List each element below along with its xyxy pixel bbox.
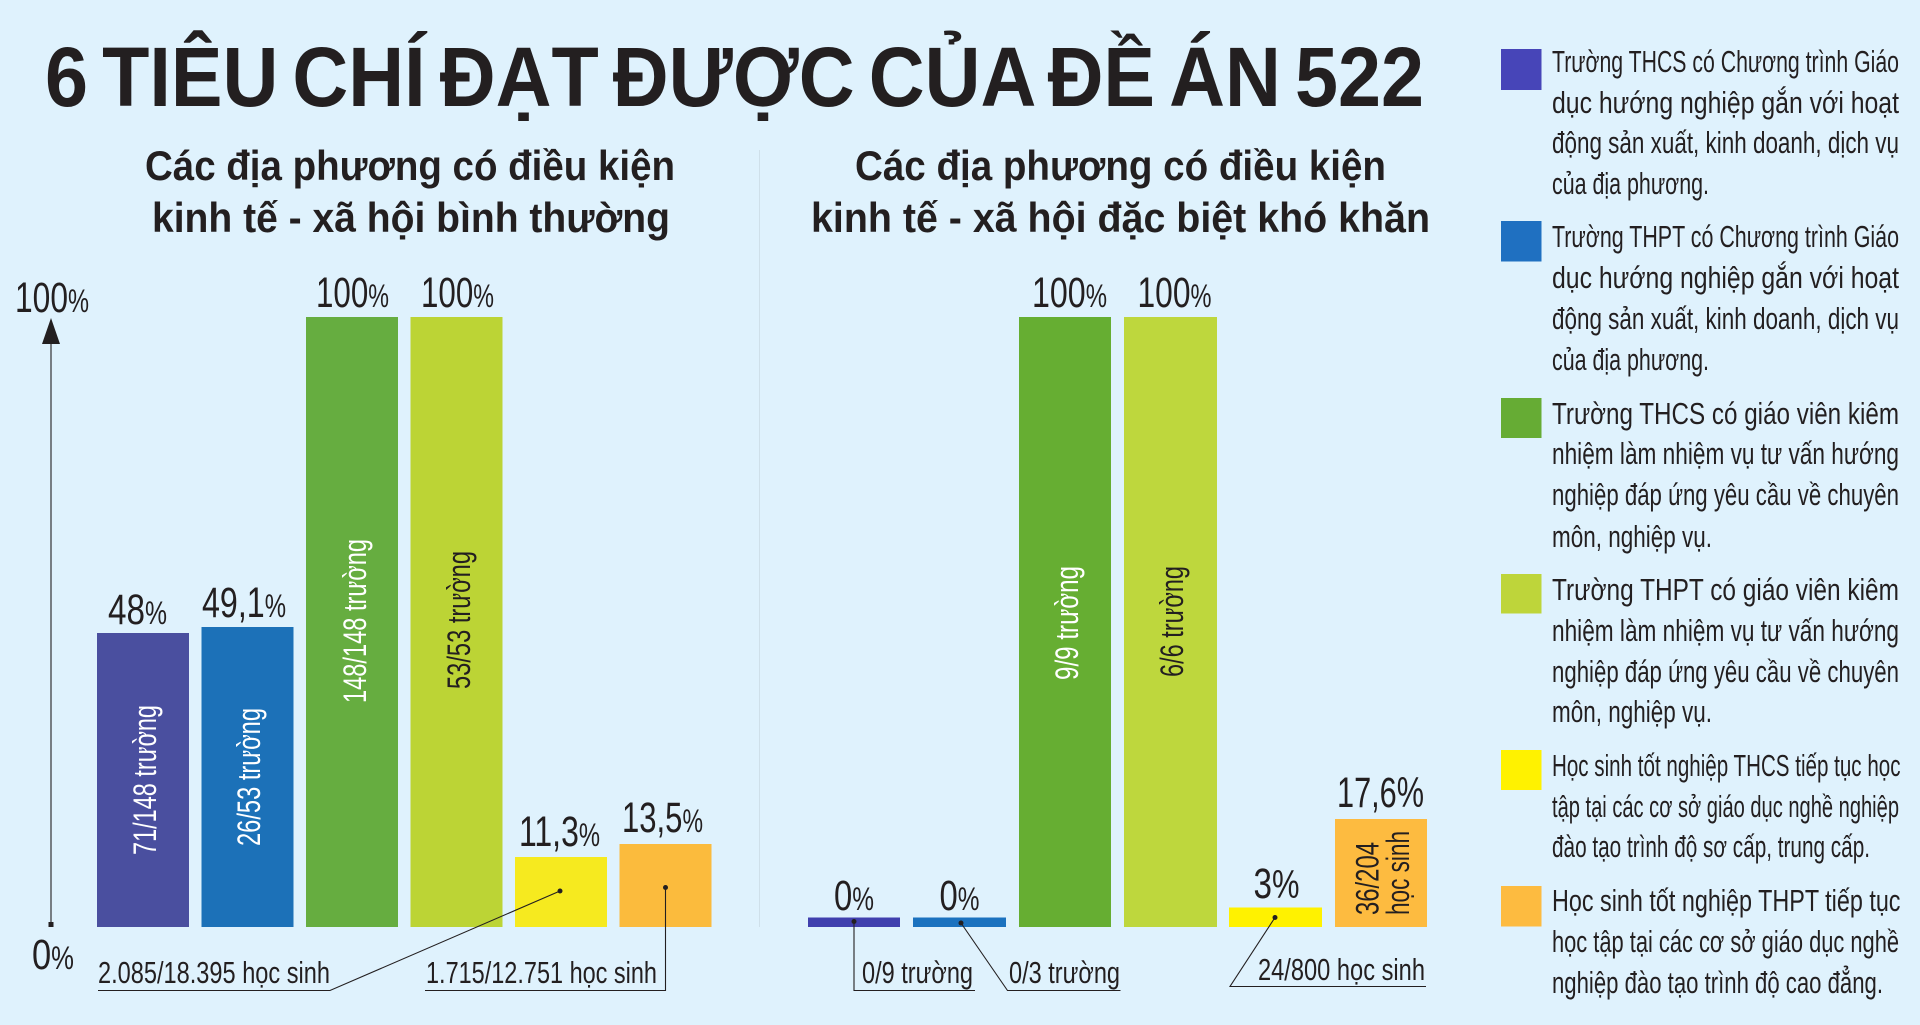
legend item: THCS teachers: môn, nghiệp vụ. bbox=[1552, 519, 1712, 554]
heading: disadvantaged localities: Các địa phương có điều kiện bbox=[855, 142, 1386, 189]
bar: THPT teachers 100%: 6/6 trường bbox=[1154, 566, 1190, 677]
bar: THCS graduates 3%: 3% bbox=[1254, 860, 1300, 908]
bar: THCS graduates 11,3%: 11,3% bbox=[519, 808, 600, 856]
axis: percent scale bbox=[15, 274, 89, 979]
legend item: THPT programme bbox=[1501, 219, 1899, 377]
heading: disadvantaged localities bbox=[811, 142, 1430, 241]
bar: THPT programme 49,1%: 26/53 trường bbox=[231, 708, 267, 846]
bar: THCS graduates 11,3% bbox=[515, 808, 607, 927]
heading: normal localities bbox=[145, 142, 675, 241]
heading: normal localities: Các địa phương có điều kiện bbox=[145, 142, 675, 189]
bar: THCS programme 0% bbox=[808, 872, 900, 927]
bar: THPT graduates 17,6%: học sinh bbox=[1380, 831, 1416, 915]
bar: THCS teachers 100%: 100% bbox=[1032, 269, 1107, 317]
axis: percent scale: 100% bbox=[15, 274, 89, 322]
bar: THCS teachers 100%: 148/148 trường bbox=[337, 539, 373, 703]
bar: THCS teachers 100%: 9/9 trường bbox=[1049, 566, 1085, 680]
bar: THPT teachers 100%: 100% bbox=[1138, 269, 1212, 317]
bar: THPT graduates 17,6% bbox=[1335, 769, 1427, 927]
bar: THPT programme 49,1%: 49,1% bbox=[202, 579, 286, 627]
legend bbox=[1501, 44, 1900, 1000]
callout: 2.085/18.395 học sinh bbox=[98, 888, 562, 990]
bar: THCS programme 48%: 48% bbox=[108, 586, 167, 634]
callout: 0/9 trường bbox=[852, 919, 975, 990]
bar: THPT teachers 100%: 100% bbox=[421, 269, 494, 317]
bar: THPT graduates 13,5%: 13,5% bbox=[622, 794, 703, 842]
legend item: THCS teachers bbox=[1501, 396, 1899, 554]
legend item: THCS programme bbox=[1501, 44, 1899, 201]
bar: THPT programme 49,1% bbox=[202, 579, 294, 927]
callout: 2.085/18.395 học sinh: 2.085/18.395 học sinh bbox=[98, 955, 330, 990]
callout: 0/3 trường: 0/3 trường bbox=[1009, 955, 1120, 990]
bar: THPT teachers 100%: 53/53 trường bbox=[441, 551, 477, 689]
callout: 24/800 học sinh bbox=[1230, 915, 1426, 987]
callout: 0/9 trường: 0/9 trường bbox=[862, 955, 973, 990]
heading: disadvantaged localities: kinh tế - xã hội đặc biệt khó khăn bbox=[811, 194, 1430, 241]
legend item: THCS graduates bbox=[1501, 748, 1900, 864]
callout: 0/3 trường bbox=[958, 920, 1120, 990]
bar: THPT graduates 17,6%: 36/204 bbox=[1350, 842, 1386, 915]
legend item: THPT programme: của địa phương. bbox=[1552, 342, 1709, 377]
legend item: THPT teachers bbox=[1501, 572, 1899, 729]
bar: THPT graduates 17,6%: 17,6% bbox=[1337, 769, 1424, 817]
bar: THCS teachers 100%: 100% bbox=[316, 269, 389, 317]
heading: normal localities: kinh tế - xã hội bình thường bbox=[152, 194, 670, 241]
bar: THPT programme 0%: 0% bbox=[940, 872, 980, 920]
bar chart: normal localities bbox=[97, 269, 712, 927]
callout: 1.715/12.751 học sinh bbox=[425, 885, 668, 990]
bar: THCS teachers 100% bbox=[306, 269, 398, 927]
legend item: THPT graduates bbox=[1501, 883, 1900, 1000]
callout: 24/800 học sinh: 24/800 học sinh bbox=[1258, 952, 1425, 987]
title: 6 TIÊU CHÍ ĐẠT ĐƯỢC CỦA ĐỀ ÁN 522 bbox=[45, 30, 1424, 124]
bar: THCS graduates 3% bbox=[1229, 860, 1322, 927]
legend item: THPT teachers: môn, nghiệp vụ. bbox=[1552, 694, 1712, 729]
bar: THCS teachers 100% bbox=[1019, 269, 1111, 927]
bar: THPT teachers 100% bbox=[410, 269, 502, 927]
bar chart: disadvantaged localities bbox=[808, 269, 1427, 927]
bar: THPT teachers 100% bbox=[1124, 269, 1217, 927]
bar: THPT graduates 13,5% bbox=[620, 794, 712, 927]
bar: THCS programme 48% bbox=[97, 586, 189, 927]
legend item: THCS programme: của địa phương. bbox=[1552, 166, 1709, 201]
bar: THCS programme 48%: 71/148 trường bbox=[127, 705, 163, 855]
bar: THCS programme 0%: 0% bbox=[834, 872, 874, 920]
callout: 1.715/12.751 học sinh: 1.715/12.751 học sinh bbox=[426, 955, 657, 990]
bar: THPT programme 0% bbox=[913, 872, 1006, 927]
axis: percent scale: 0% bbox=[32, 931, 74, 979]
